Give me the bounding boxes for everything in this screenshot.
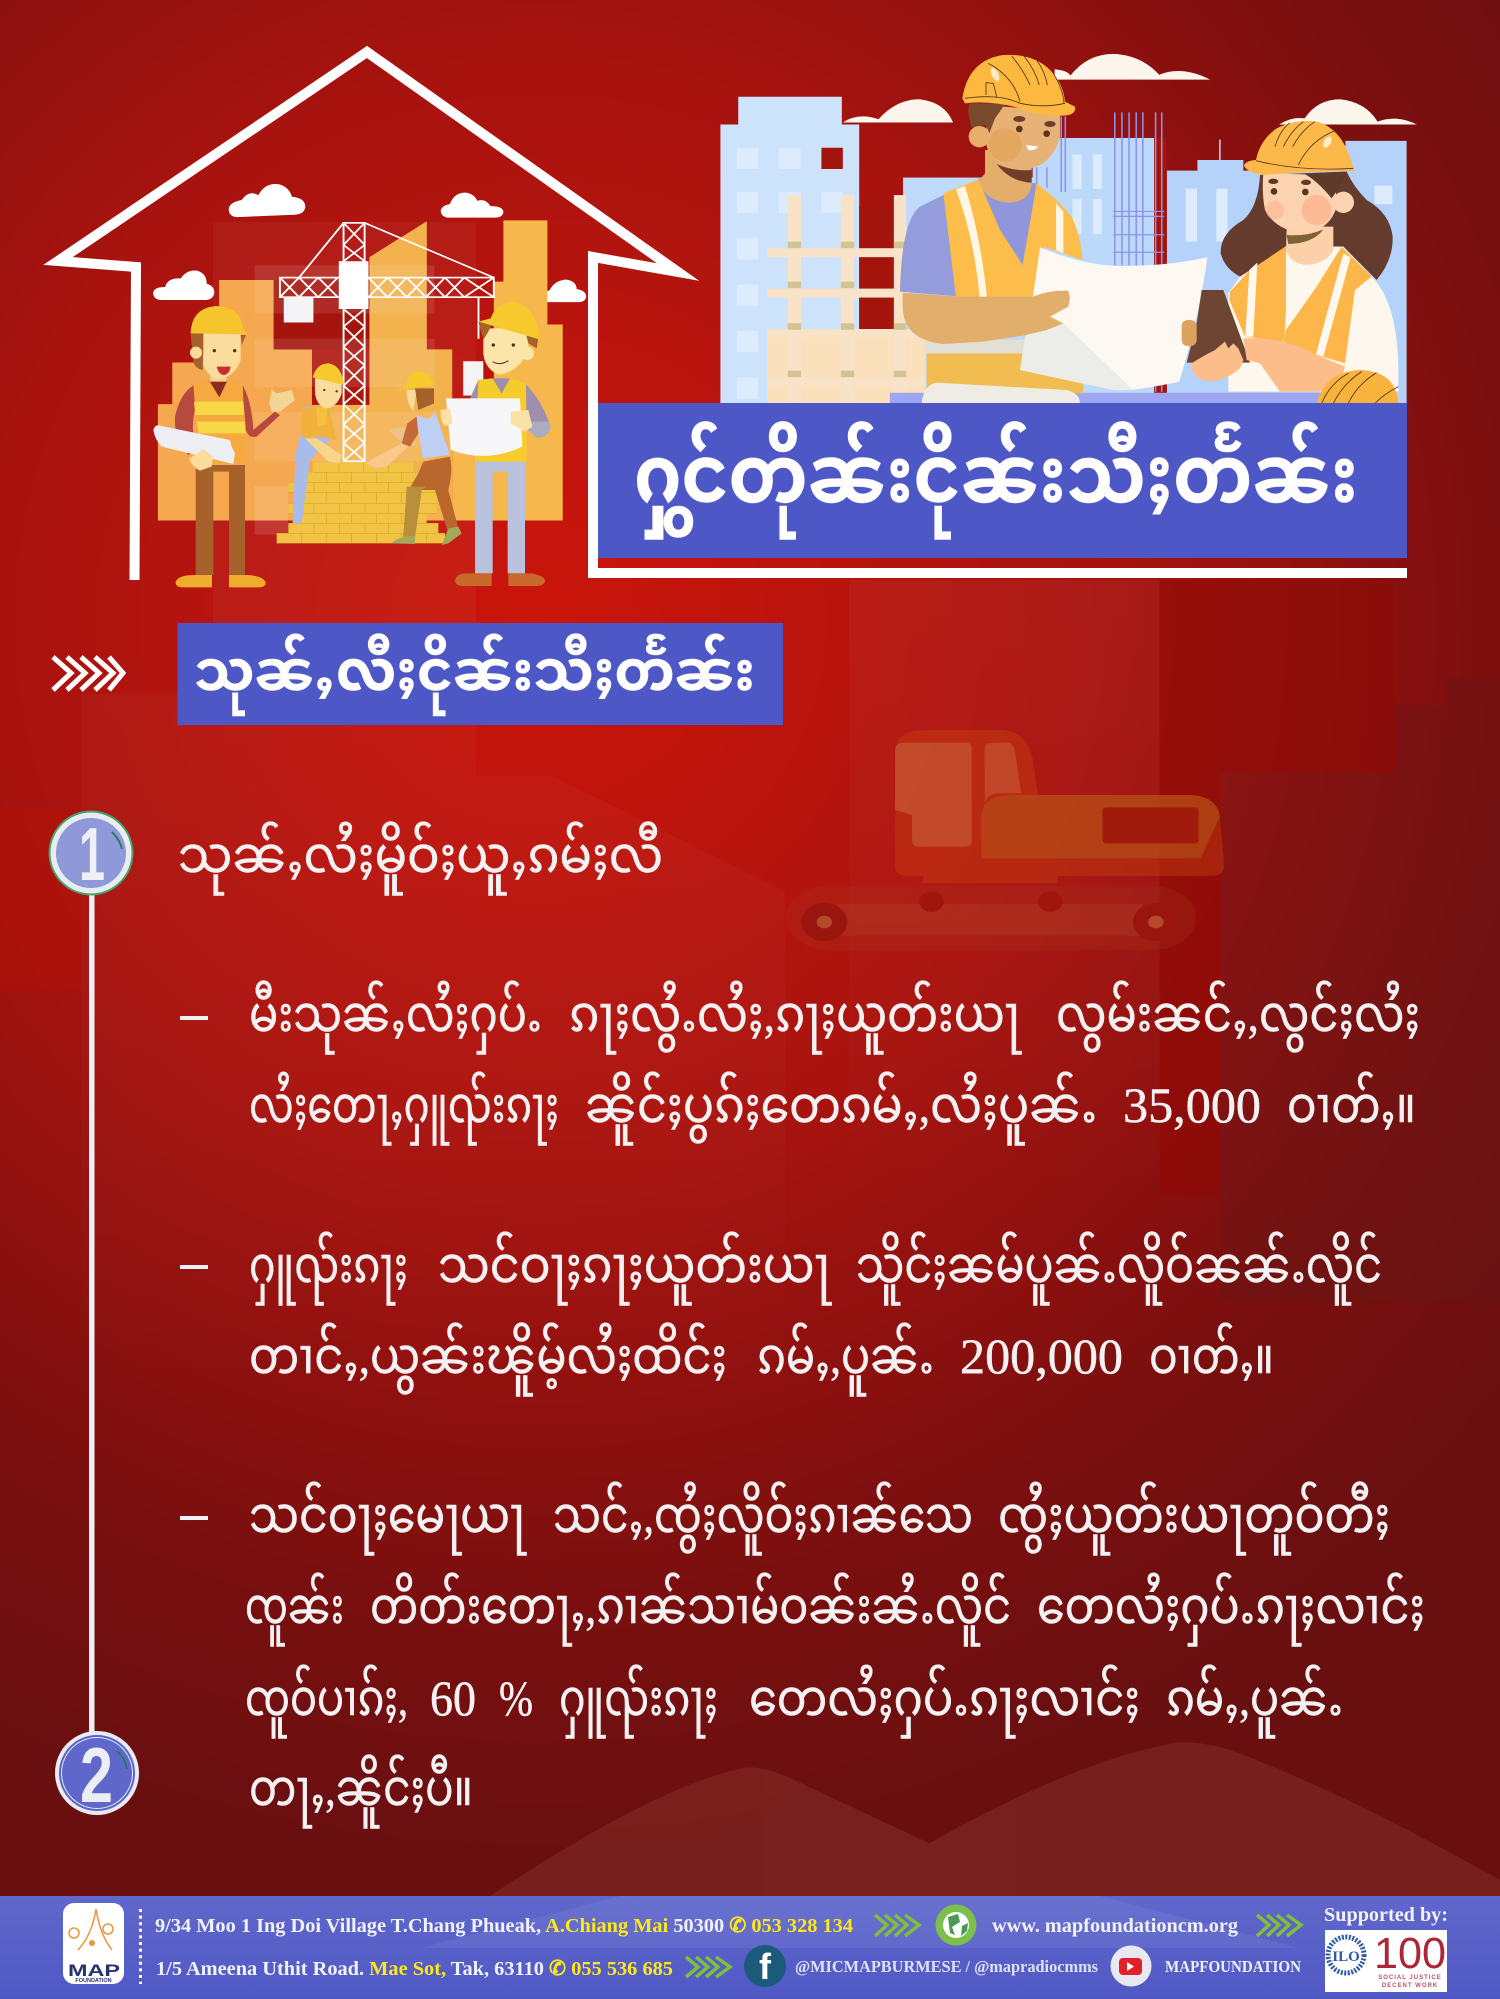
badge 1: 1 bbox=[79, 812, 105, 896]
footer bar bbox=[0, 1896, 1500, 1999]
bullet block 3: 60 bbox=[430, 1670, 476, 1726]
item heading: သုၼ်ႇလႆႈမိူဝ်ႈယူႇၵမ်ႈလီ bbox=[178, 822, 663, 895]
bullet block 1: လႆႈတေႃႇႁူၺ်းၵႃႈ bbox=[249, 1072, 559, 1145]
blue buildings bbox=[720, 97, 859, 403]
man body bbox=[900, 178, 1083, 393]
bullet block 3: ၸူၼ်း bbox=[245, 1573, 344, 1646]
title banner: ႁွင်တိုၼ်းငိုၼ်းသီႈတႅၼ်း bbox=[634, 420, 1358, 540]
desk band bbox=[890, 393, 1320, 403]
illustration: engineers bbox=[900, 55, 1398, 403]
icon: globe bbox=[936, 1904, 976, 1946]
bullet block 1: ဝၢတ်ႇ။ bbox=[1287, 1072, 1416, 1133]
bullet block 3: ၸူဝ်ပၢၵ်ႈ, bbox=[245, 1665, 408, 1738]
bullet block 2: ၵမ်ႇ,ပူၼ်ႉ bbox=[757, 1323, 934, 1396]
bullet block 1: ၼိူင်ႈပွၵ်ႈတေၵမ်ႇ,လႆႈပူၼ်ႉ bbox=[585, 1072, 1097, 1145]
bullet block 3: တိတ်းတေႃႇ,ၵၢၼ်သၢမ်ဝၼ်းၼႆႉလိူင် bbox=[370, 1573, 1011, 1646]
youtube name: MAPFOUNDATION bbox=[1165, 1957, 1302, 1976]
left worker bbox=[153, 306, 295, 587]
bullet block 3: % bbox=[499, 1670, 533, 1726]
rebar tower bbox=[1154, 138, 1167, 392]
man arm and head bbox=[903, 55, 1075, 344]
supported by: Supported by: bbox=[1324, 1904, 1448, 1926]
crane bbox=[280, 223, 494, 461]
ILO logo: DECENT WORK bbox=[1382, 1983, 1438, 1989]
bullet block 2: သိူင်ႈၼမ်ပူၼ်ႉလိူဝ်ၼၼ်ႉလိူင် bbox=[856, 1232, 1382, 1305]
illustration: crane and city blocks bbox=[153, 184, 586, 535]
title banner bbox=[598, 403, 1407, 558]
bullet block 1 bbox=[180, 981, 1420, 1145]
badge 2: 2 bbox=[80, 1731, 113, 1819]
badge 1 bbox=[50, 812, 132, 896]
icon: facebook: f bbox=[759, 1946, 772, 1987]
clouds bbox=[843, 54, 1417, 125]
bullet block 1: ၵႃႈလွႆႉလႆႈ,ၵႃႈယူတ်းယႃ bbox=[569, 981, 1022, 1054]
icon: facebook bbox=[744, 1945, 786, 1987]
MAP logo: MAP bbox=[68, 1961, 120, 1980]
section heading bbox=[178, 623, 783, 725]
address line 2: 1/5 Ameena Uthit Road. Mae Sot, Tak, 63110 ✆ 055 536 685 bbox=[156, 1958, 673, 1980]
bullet block 3 bbox=[180, 1482, 1425, 1828]
address line 1: 9/34 Moo 1 Ing Doi Village T.Chang Phueak, A.Chiang Mai 50300 ✆ 053 328 134 bbox=[155, 1915, 853, 1937]
background excavator silhouette bbox=[786, 730, 1224, 950]
orange city blocks bbox=[158, 280, 312, 520]
bullet block 1: လွမ်းၼင်ႇ,လွင်ႈလႆႈ bbox=[1056, 981, 1420, 1052]
facebook handles: @MICMAPBURMESE / @mapradiocmms bbox=[795, 1957, 1098, 1976]
badge 2 bbox=[55, 1731, 139, 1819]
ILO logo: 100 bbox=[1374, 1929, 1446, 1978]
bullet block 3: တေလႆႈႁပ်ႉၵႃႈလၢင်ႈ bbox=[749, 1665, 1140, 1738]
website: www. mapfoundationcm.org bbox=[992, 1915, 1239, 1937]
right worker bbox=[441, 302, 551, 586]
illustration: builders and bricks bbox=[153, 302, 551, 587]
ILO logo: SOCIAL JUSTICE bbox=[1378, 1975, 1442, 1981]
bullet block 3: ႁူၺ်းၵႃႈ bbox=[559, 1665, 718, 1738]
section heading: သုၼ်ႇလီႈငိုၼ်းသီႈတႅၼ်း bbox=[194, 633, 755, 716]
MAP logo bbox=[63, 1903, 124, 1984]
bricks bbox=[277, 462, 445, 543]
bullet block 2 bbox=[180, 1232, 1382, 1396]
bullet block 3: တႃႇ,ၼိူင်ႈပီ။ bbox=[249, 1755, 473, 1828]
bullet block 2: ဝၢတ်ႇ။ bbox=[1149, 1323, 1274, 1384]
windows bbox=[737, 148, 1392, 399]
ILO logo: ILO bbox=[1332, 1949, 1360, 1965]
house outline bbox=[58, 52, 1407, 580]
clouds bbox=[153, 184, 586, 302]
bullet block 2: ႁူၺ်းၵႃႈ bbox=[249, 1232, 408, 1305]
bullet block 3: ၵမ်ႇ,ပူၼ်ႉ bbox=[1166, 1665, 1343, 1738]
scaffold bbox=[859, 206, 890, 329]
MAP logo: FOUNDATION bbox=[75, 1978, 112, 1984]
blueprint bbox=[1020, 247, 1207, 390]
bullet block 3: သင်ဝႃႈမေႃယႃ bbox=[249, 1482, 527, 1555]
bullet block 3: ၸွႆႈယူတ်းယႃတူဝ်တီႈ bbox=[998, 1482, 1390, 1555]
desk roll bbox=[922, 383, 1080, 403]
icon: youtube bbox=[1110, 1946, 1152, 1986]
small worker left bbox=[293, 363, 344, 523]
bullet block 3: သင်ႇ,ၸွႆႈလိူဝ်ႈၵၢၼ်သေ bbox=[553, 1482, 973, 1555]
woman bbox=[1182, 121, 1398, 403]
background sand mounds bbox=[490, 1742, 1500, 1896]
green chevrons row bbox=[686, 1915, 1301, 1977]
bullet block 1: မီးသုၼ်ႇလႆႈႁပ်ႉ bbox=[249, 981, 542, 1054]
arrow chevrons bbox=[53, 657, 123, 690]
bullet block 2: တၢင်ႇ,ယွၼ်းၽိူမ့်လႆႈထိင်ႈ bbox=[249, 1323, 727, 1396]
illustration: city skyline bbox=[720, 54, 1417, 403]
bullet block 2: သင်ဝႃႈၵႃႈယူတ်းယႃ bbox=[438, 1232, 832, 1305]
small worker right bbox=[365, 371, 462, 545]
bullet block 3: တေလႆႈႁပ်ႉၵႃႈလၢင်ႈ bbox=[1037, 1573, 1425, 1646]
ILO logo bbox=[1325, 1929, 1447, 1992]
timeline line bbox=[89, 893, 94, 1735]
bullet block 2: 200,000 bbox=[960, 1328, 1123, 1384]
dotted divider bbox=[139, 1909, 142, 1984]
bullet block 1: 35,000 bbox=[1123, 1077, 1261, 1133]
